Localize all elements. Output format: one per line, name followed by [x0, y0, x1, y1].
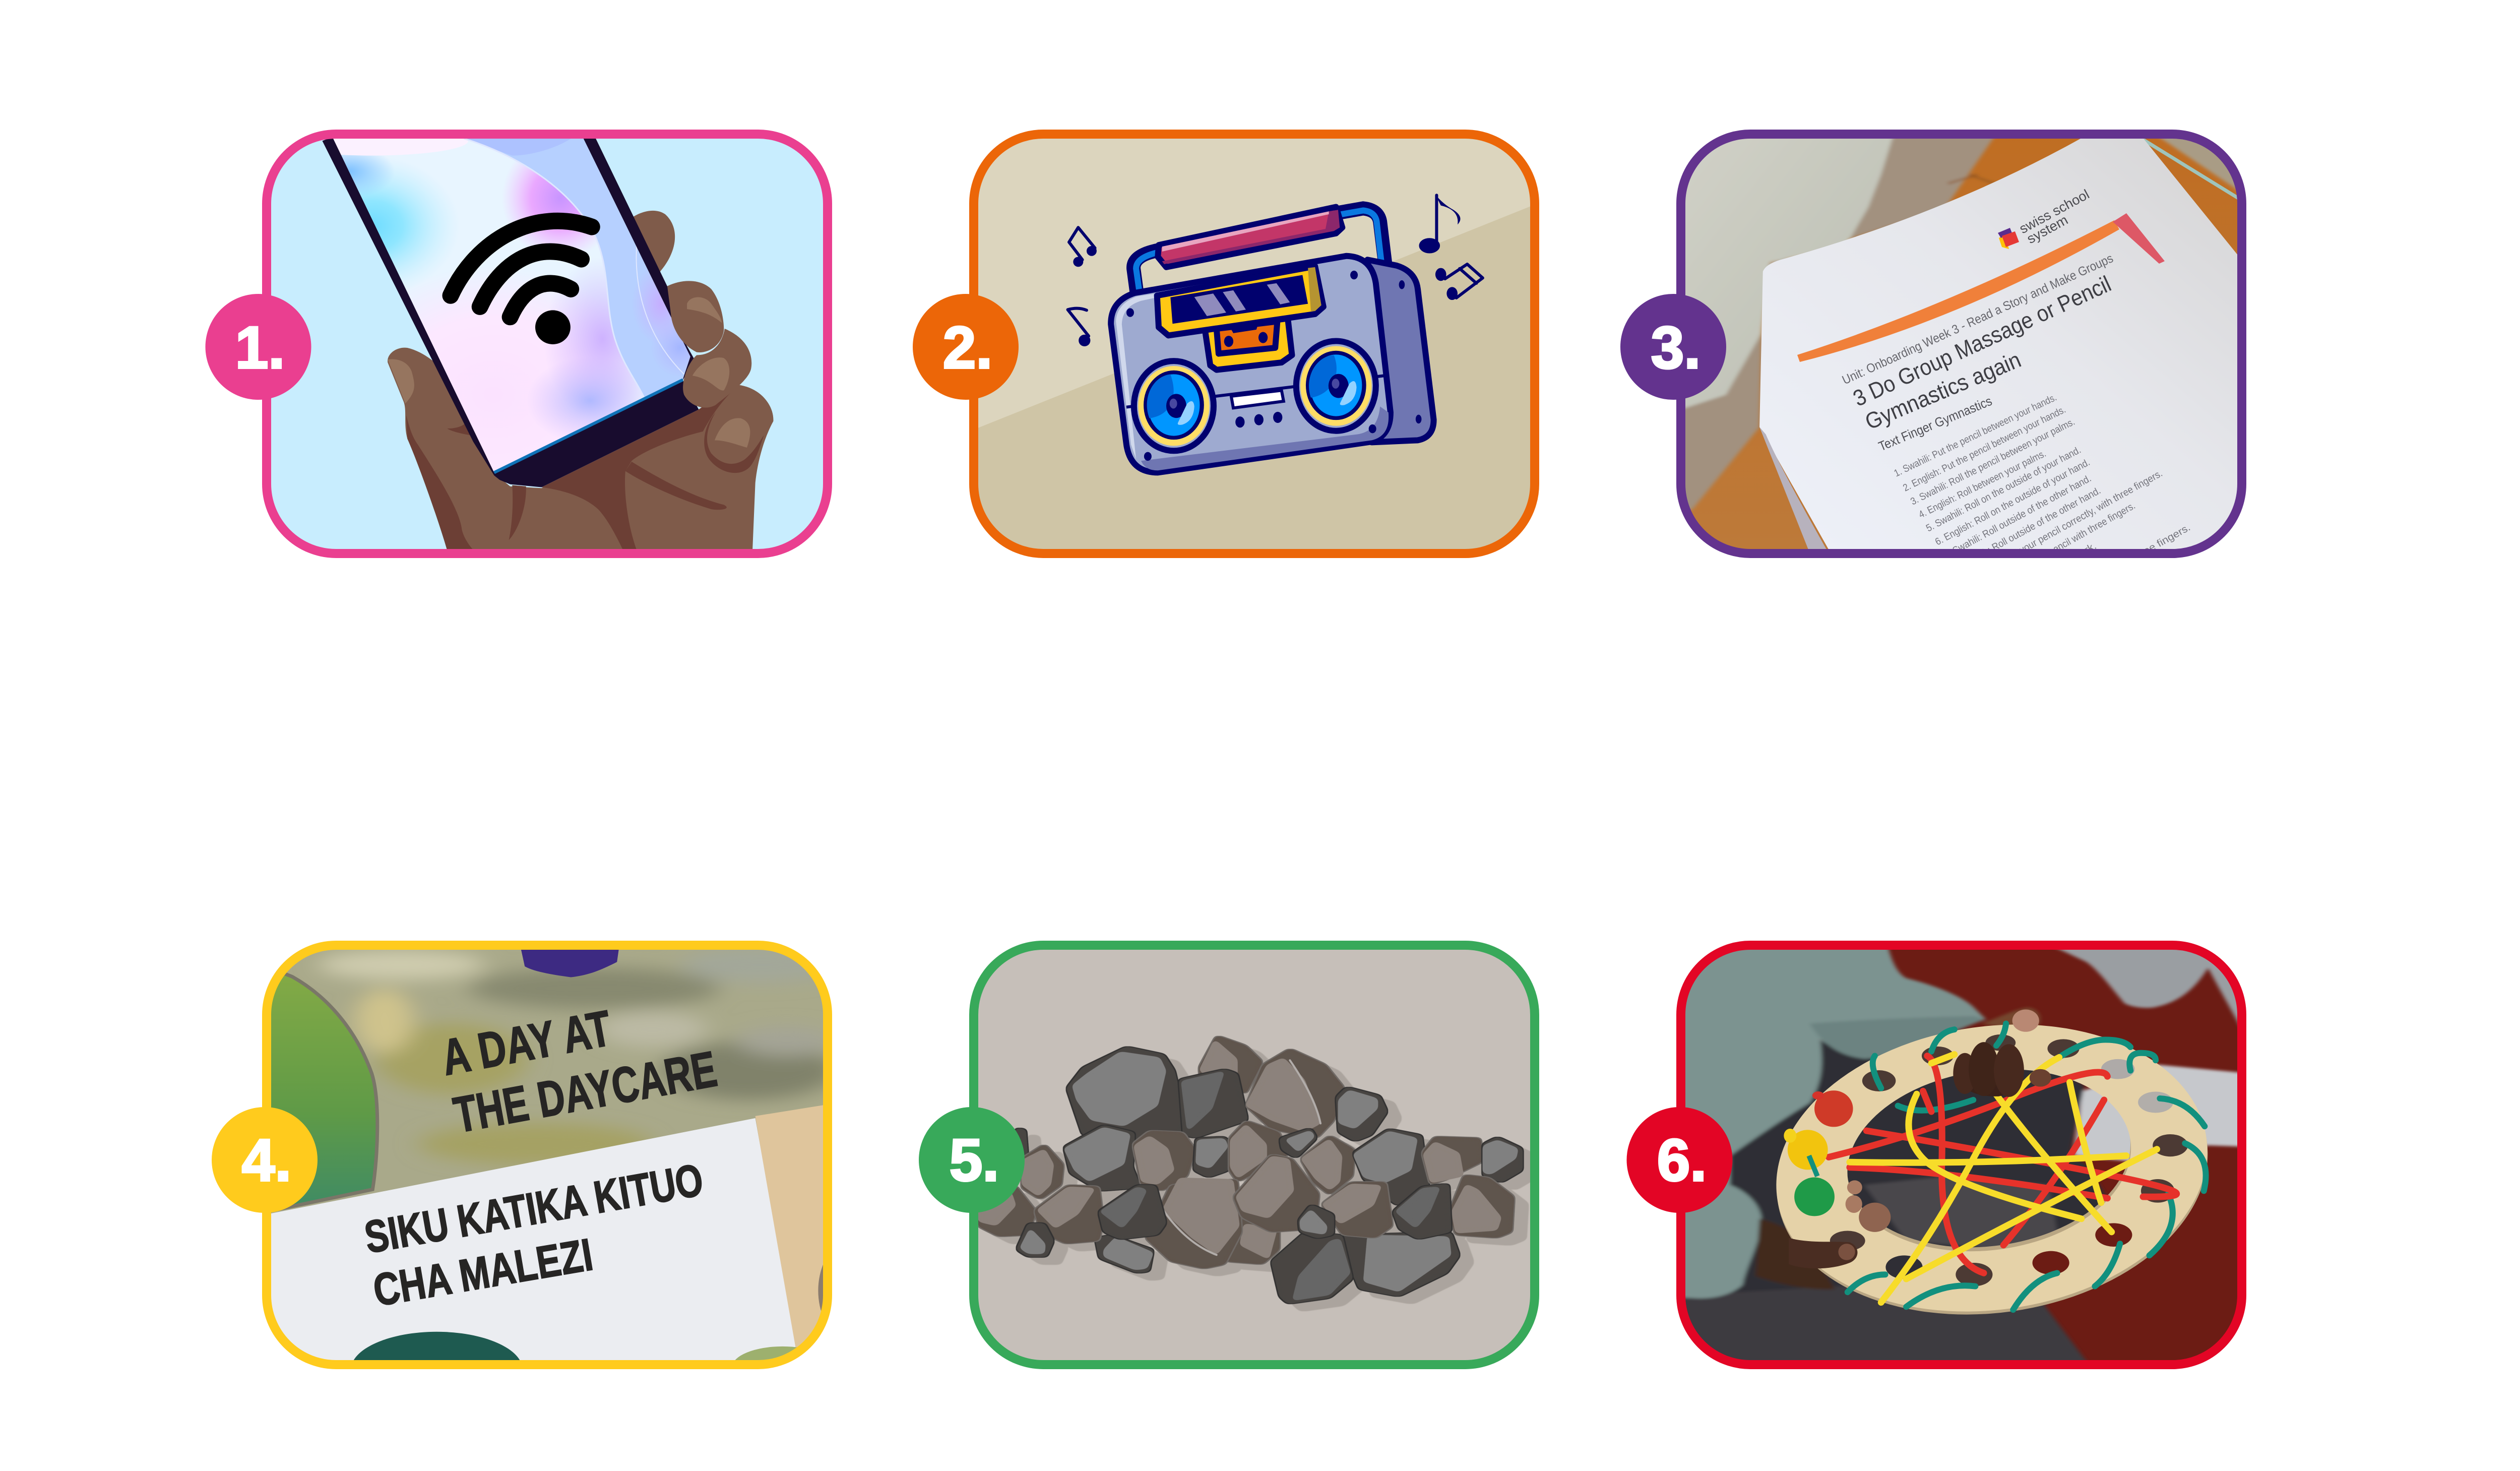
thumb nail — [388, 359, 414, 404]
badge: number 1: 1. — [235, 315, 285, 381]
tape strip and speakers — [1126, 341, 1384, 451]
purple shape at top of cover — [521, 947, 619, 977]
wooden ring — [1757, 998, 2227, 1341]
sheet text: system — [2025, 212, 2070, 247]
tan side panel — [755, 1105, 829, 1364]
sheet text — [1840, 187, 2192, 645]
laces: teal around ring — [1848, 1023, 2206, 1310]
cassette — [1205, 319, 1292, 370]
sheet text: 4. English: Roll between your palms. — [1917, 448, 2048, 520]
photo: bilingual book cover — [255, 941, 841, 1408]
panel 6 border — [1681, 945, 2242, 1365]
panel 5: pile of stones — [919, 941, 1540, 1370]
sheet text: 6. English: Roll on the outside of your hand. — [1933, 457, 2092, 547]
hand: top finger — [633, 211, 675, 272]
photo: lesson sheet on a wooden table — [1671, 128, 2258, 645]
dark green bush — [351, 1332, 523, 1408]
illustration: boombox with music notes — [969, 128, 1544, 559]
sheet text: 12. English: Hold your pencil with three fingers. — [1984, 522, 2192, 645]
boombox side — [1367, 260, 1434, 442]
cover text: Swahili title: SIKU KATIKA KITUO — [361, 1154, 707, 1263]
cover text: Swahili title: CHA MALEZI — [370, 1230, 596, 1316]
badge: number 6: 6. — [1657, 1127, 1707, 1194]
badge: number 3: 3. — [1651, 315, 1700, 381]
badge: number 4 — [212, 1107, 318, 1213]
laces: red — [1829, 1056, 2177, 1273]
cover text: Swahili title — [361, 1154, 707, 1316]
hand: front fingers — [667, 281, 772, 473]
display and buttons — [1126, 271, 1421, 461]
phone screen — [275, 126, 716, 524]
sheet text: 2. English: Put the pencil between your hands. — [1901, 404, 2067, 494]
sheet text: 11. Swahili: Write your mark. — [1976, 540, 2098, 616]
panel 4 border — [267, 945, 828, 1365]
panel 1: phone with wifi symbol — [206, 126, 833, 559]
badge: number 5: 5. — [950, 1127, 999, 1194]
illustration: hand holding phone — [262, 126, 833, 559]
sheet text: 7. Swahili: Roll outside of the other hand. — [1942, 473, 2093, 561]
paper sheet — [1759, 137, 2242, 553]
sweater — [1663, 944, 1986, 1299]
hand: palm and thumb — [388, 348, 773, 553]
icons: music notes — [1068, 195, 1483, 346]
grey cloth top right — [2049, 944, 2250, 1044]
badge: number 6 — [1627, 1107, 1733, 1213]
panel 2: radio boombox — [913, 128, 1544, 559]
panel 3: printed lesson sheet — [1620, 128, 2258, 645]
white sleeve right — [2074, 1065, 2250, 1161]
badge: number 3 — [1620, 294, 1726, 400]
sheet text: 1. Swahili: Put the pencil between your hands. — [1893, 392, 2058, 479]
illustration: stones — [969, 941, 1540, 1370]
sheet text: swiss school — [2017, 187, 2092, 236]
hand: shading — [406, 386, 738, 553]
panel 2 border — [974, 134, 1535, 554]
photo: child holding wooden lacing ring — [1663, 941, 2250, 1370]
child hand top — [1982, 1007, 2040, 1032]
dark trousers — [1663, 1029, 2116, 1367]
panel 5 border — [974, 945, 1535, 1365]
badge: number 2: 2. — [943, 315, 992, 381]
light green bush — [732, 1346, 833, 1387]
badge: number 4: 4. — [242, 1127, 291, 1194]
book title background: green hill — [255, 962, 377, 1214]
sheet text: 10. English: Hold your pencil with three fingers. — [1968, 500, 2137, 602]
panel 3 border — [1681, 134, 2242, 554]
child fingers over ring — [1789, 1010, 2051, 1268]
icon: wifi signal — [451, 221, 592, 344]
sheet corner triangle — [2113, 213, 2165, 264]
panel 1 border — [267, 134, 828, 554]
boombox handle — [1133, 207, 1385, 293]
phone body — [322, 137, 699, 487]
white title card — [255, 1118, 798, 1364]
cover text: English title: THE DAYCARE — [450, 1040, 721, 1144]
sheet text: 5. Swahili: Roll on the outside of your hand. — [1924, 445, 2083, 534]
sheet logo — [1998, 228, 2019, 249]
badge: number 1 — [206, 294, 311, 400]
sheet text: Gymnastics again — [1861, 346, 2025, 435]
panel 6: lacing ring toy — [1627, 941, 2250, 1370]
sheet text: 9. Swahili: Hold your pencil correctly, with three fingers. — [1959, 468, 2165, 588]
sheet text: 8. English: Roll outside of the other hand. — [1950, 485, 2103, 575]
infographic canvas — [206, 130, 2246, 1369]
panel 4: storybook cover — [212, 941, 841, 1408]
sheet header stripe — [1797, 220, 2119, 362]
child hand bottom — [1755, 1219, 1857, 1290]
badge: number 5 — [919, 1107, 1025, 1213]
ring holes — [1830, 1034, 2188, 1286]
cassette door — [1157, 266, 1324, 335]
phone edge highlight — [494, 380, 683, 472]
boombox front — [1111, 256, 1391, 472]
sheet text: 3 Do Group Massage or Pencil — [1849, 271, 2115, 411]
beads: red yellow green — [1784, 1090, 1853, 1216]
sheet text: 3. Swahili: Roll the pencil between your palms. — [1909, 416, 2076, 507]
sheet text: Text Finger Gymnastics — [1876, 393, 1994, 454]
sheet text: Unit: Onboarding Week 3 - Read a Story and Make Groups — [1840, 251, 2115, 387]
cover text: English title — [437, 1000, 721, 1144]
laces: yellow — [1850, 1055, 2157, 1303]
cover text: English title: A DAY AT — [437, 1000, 615, 1086]
badge: number 2 — [913, 294, 1019, 400]
